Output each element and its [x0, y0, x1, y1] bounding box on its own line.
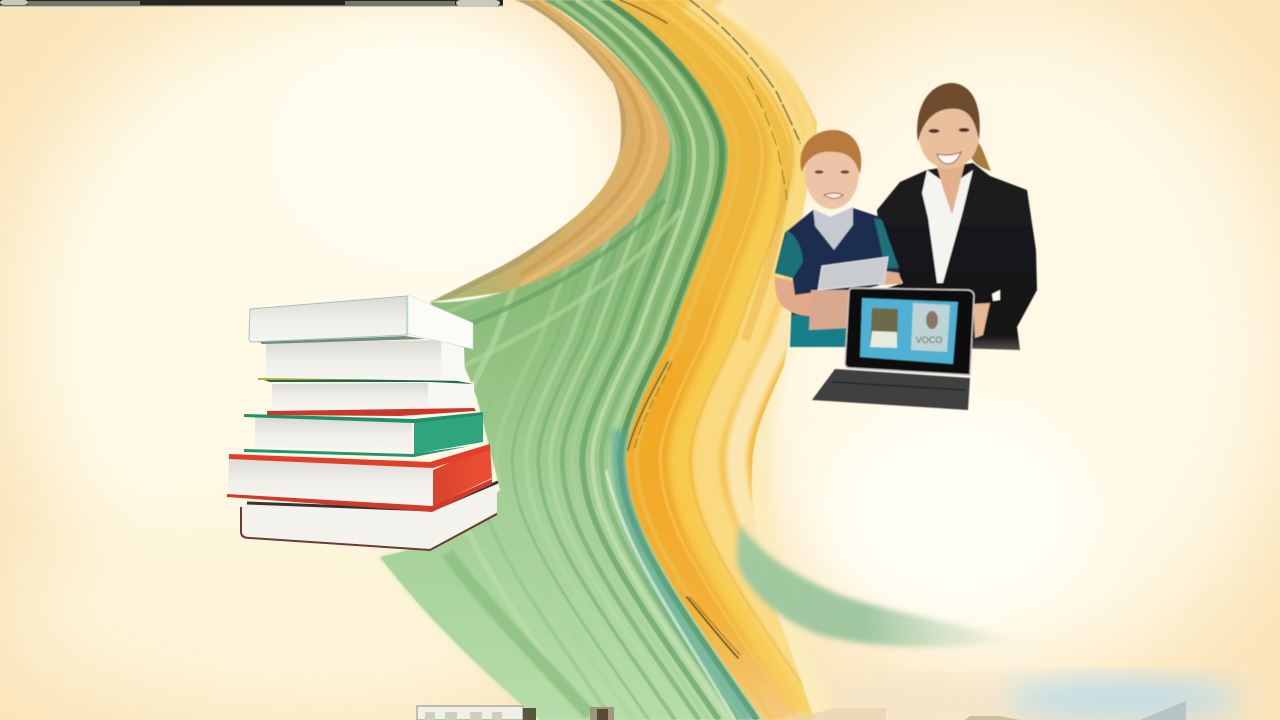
ribbon: dark ink strokes — [620, 0, 800, 658]
book: thin red-bound — [258, 377, 476, 416]
person: teacher — [850, 83, 1037, 350]
book: green — [244, 412, 483, 457]
stack of books — [227, 295, 498, 550]
bottom building fragments — [417, 701, 1186, 720]
laptop display pages — [870, 303, 950, 352]
fragment: small tower — [590, 707, 614, 720]
ribbon: teal lower edge — [619, 430, 750, 720]
boy face — [805, 137, 859, 209]
laptop keyboard — [812, 369, 970, 410]
bottom right blue haze — [820, 680, 1245, 720]
laptop — [812, 288, 974, 410]
fragment: small roof — [965, 716, 1020, 720]
laptop display — [860, 298, 958, 364]
ribbon: yellow band — [610, 0, 818, 720]
ribbon: green streaks — [435, 0, 757, 720]
teacher neck — [936, 163, 965, 215]
ribbon: sweep toward the books — [440, 200, 680, 370]
boy shirt — [775, 208, 900, 347]
teacher cuff gap — [992, 290, 1000, 301]
teacher hair — [917, 83, 980, 142]
laptop display pages: VOCO — [916, 335, 942, 345]
teacher blouse — [922, 170, 973, 283]
ribbon: tan outer band — [425, 0, 690, 305]
fragment: window block — [417, 706, 536, 720]
boy collar — [813, 207, 853, 250]
ribbon: pale highlight — [606, 470, 735, 720]
teacher eyes and smile — [928, 128, 970, 164]
teacher face — [919, 103, 979, 169]
flowing ribbon of green and yellow — [370, 0, 1020, 720]
ribbon: green band — [370, 0, 770, 720]
ribbon: lower-left pale wedge — [380, 535, 640, 720]
boy lower teal hem — [790, 315, 850, 347]
laptop screen bezel — [845, 288, 974, 375]
teacher hand — [973, 303, 990, 338]
person: boy — [775, 130, 902, 347]
book: plain — [266, 340, 465, 381]
book: dark bottom — [241, 482, 498, 550]
book: red — [227, 444, 492, 512]
ribbon: right green wisp — [737, 525, 1020, 647]
boy sleeves — [775, 230, 803, 278]
ribbon: orange core and yellow streaks — [627, 0, 818, 720]
boy arms — [775, 277, 830, 318]
fragment: grey spire — [1140, 701, 1186, 720]
teacher ponytail — [970, 138, 991, 171]
ribbon: pale halo of yellow band — [740, 300, 835, 720]
book: top white — [249, 295, 473, 349]
boy tablet — [818, 257, 888, 290]
fragment: tan roof — [790, 708, 886, 720]
boy eyes and smile — [814, 170, 850, 198]
boy hair — [801, 130, 861, 174]
top film strip fragment — [0, 0, 503, 7]
teacher jacket — [850, 163, 1037, 350]
ribbon: lower dark strip — [447, 553, 590, 715]
boy clipboard — [809, 290, 850, 330]
people with tablet and laptop — [775, 83, 1037, 410]
